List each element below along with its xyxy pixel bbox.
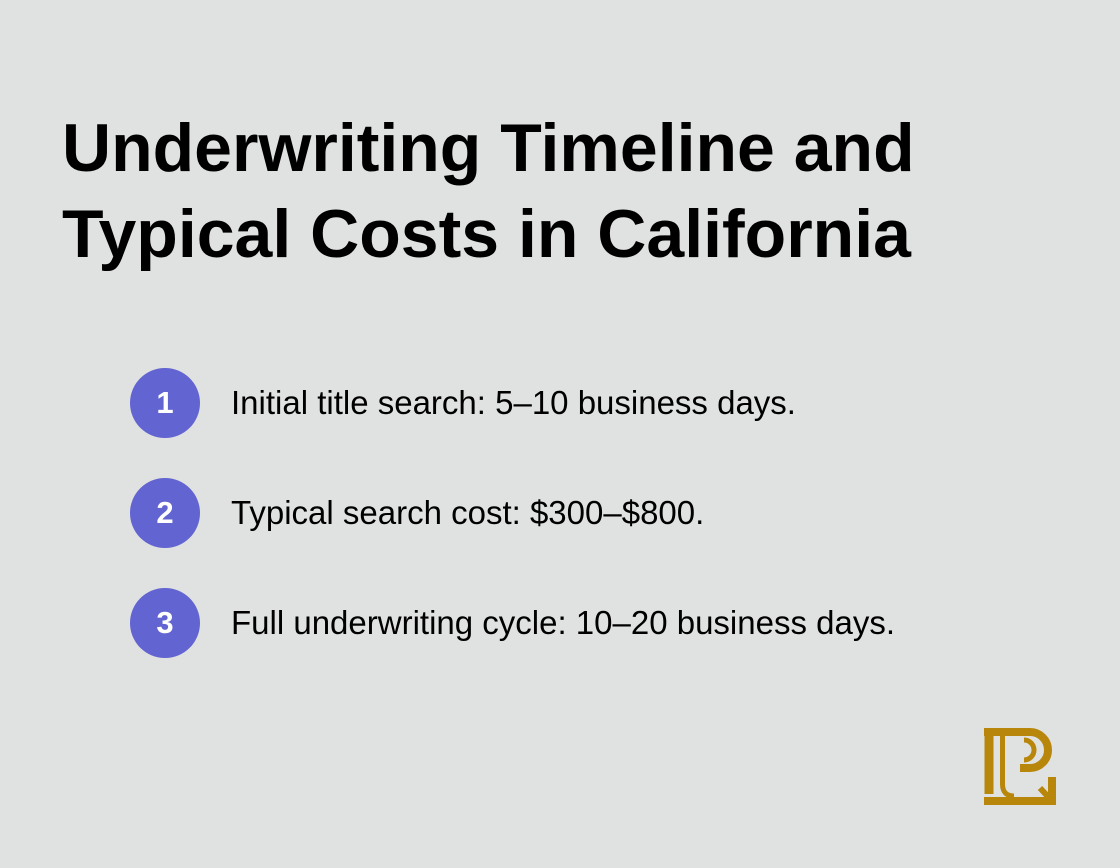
icon: logo: [984, 728, 1056, 805]
number badge 2: [130, 478, 200, 548]
number badge 3: 3: [156, 605, 174, 640]
number badge 2: 2: [156, 495, 174, 530]
text 3: Full underwriting cycle: 10–20 business days.: [231, 604, 895, 641]
item 2: [130, 478, 704, 548]
title: Underwriting Timeline and: [62, 110, 915, 186]
number badge 1: [130, 368, 200, 438]
number badge 1: 1: [156, 385, 174, 420]
number badge 3: [130, 588, 200, 658]
title: Typical Costs in California: [62, 196, 911, 272]
item 3: [130, 588, 895, 658]
text 2: Typical search cost: $300–$800.: [231, 494, 704, 531]
text 1: Initial title search: 5–10 business days.: [231, 384, 796, 421]
title: [62, 110, 915, 272]
item 1: [130, 368, 796, 438]
